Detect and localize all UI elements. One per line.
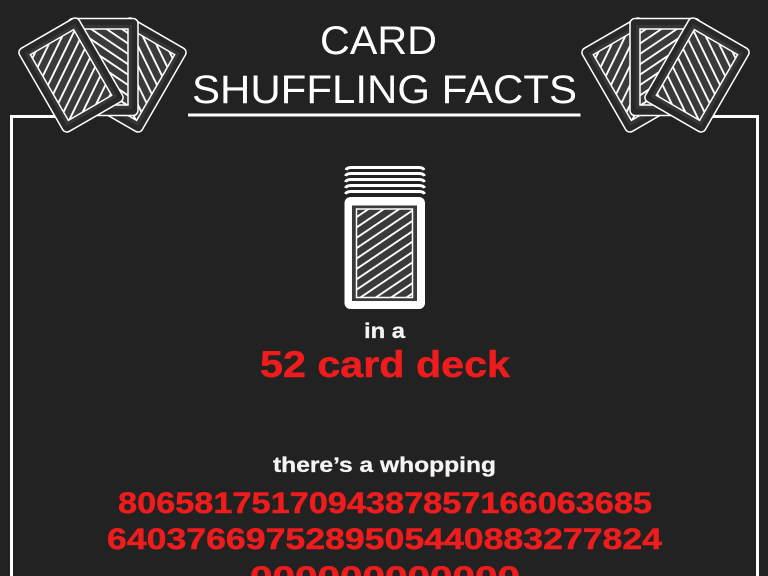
icon: card deck — [344, 168, 425, 309]
title: SHUFFLING FACTS — [192, 68, 577, 112]
title: CARD — [320, 19, 437, 63]
card: fan left — [17, 16, 125, 134]
card: fan middle — [630, 18, 700, 116]
card: fan left — [580, 16, 688, 134]
text: there's a whopping: there’s a whopping — [273, 454, 496, 477]
text: 52 card deck: 52 card deck — [260, 344, 510, 385]
card: fan middle — [68, 18, 138, 116]
title — [192, 19, 577, 112]
title underline — [188, 114, 580, 116]
content frame — [12, 116, 758, 576]
card: fan right — [643, 16, 751, 134]
text: in a: in a — [364, 320, 405, 343]
permutation number: 6403766975289505440883277824 — [107, 523, 662, 556]
deck edges — [346, 168, 424, 194]
left card fan — [17, 16, 188, 134]
deck top card — [344, 197, 425, 309]
permutation number — [107, 487, 662, 576]
permutation number: 8065817517094387857166063685 — [118, 487, 652, 520]
card: fan right — [80, 16, 188, 134]
right card fan — [580, 16, 751, 134]
